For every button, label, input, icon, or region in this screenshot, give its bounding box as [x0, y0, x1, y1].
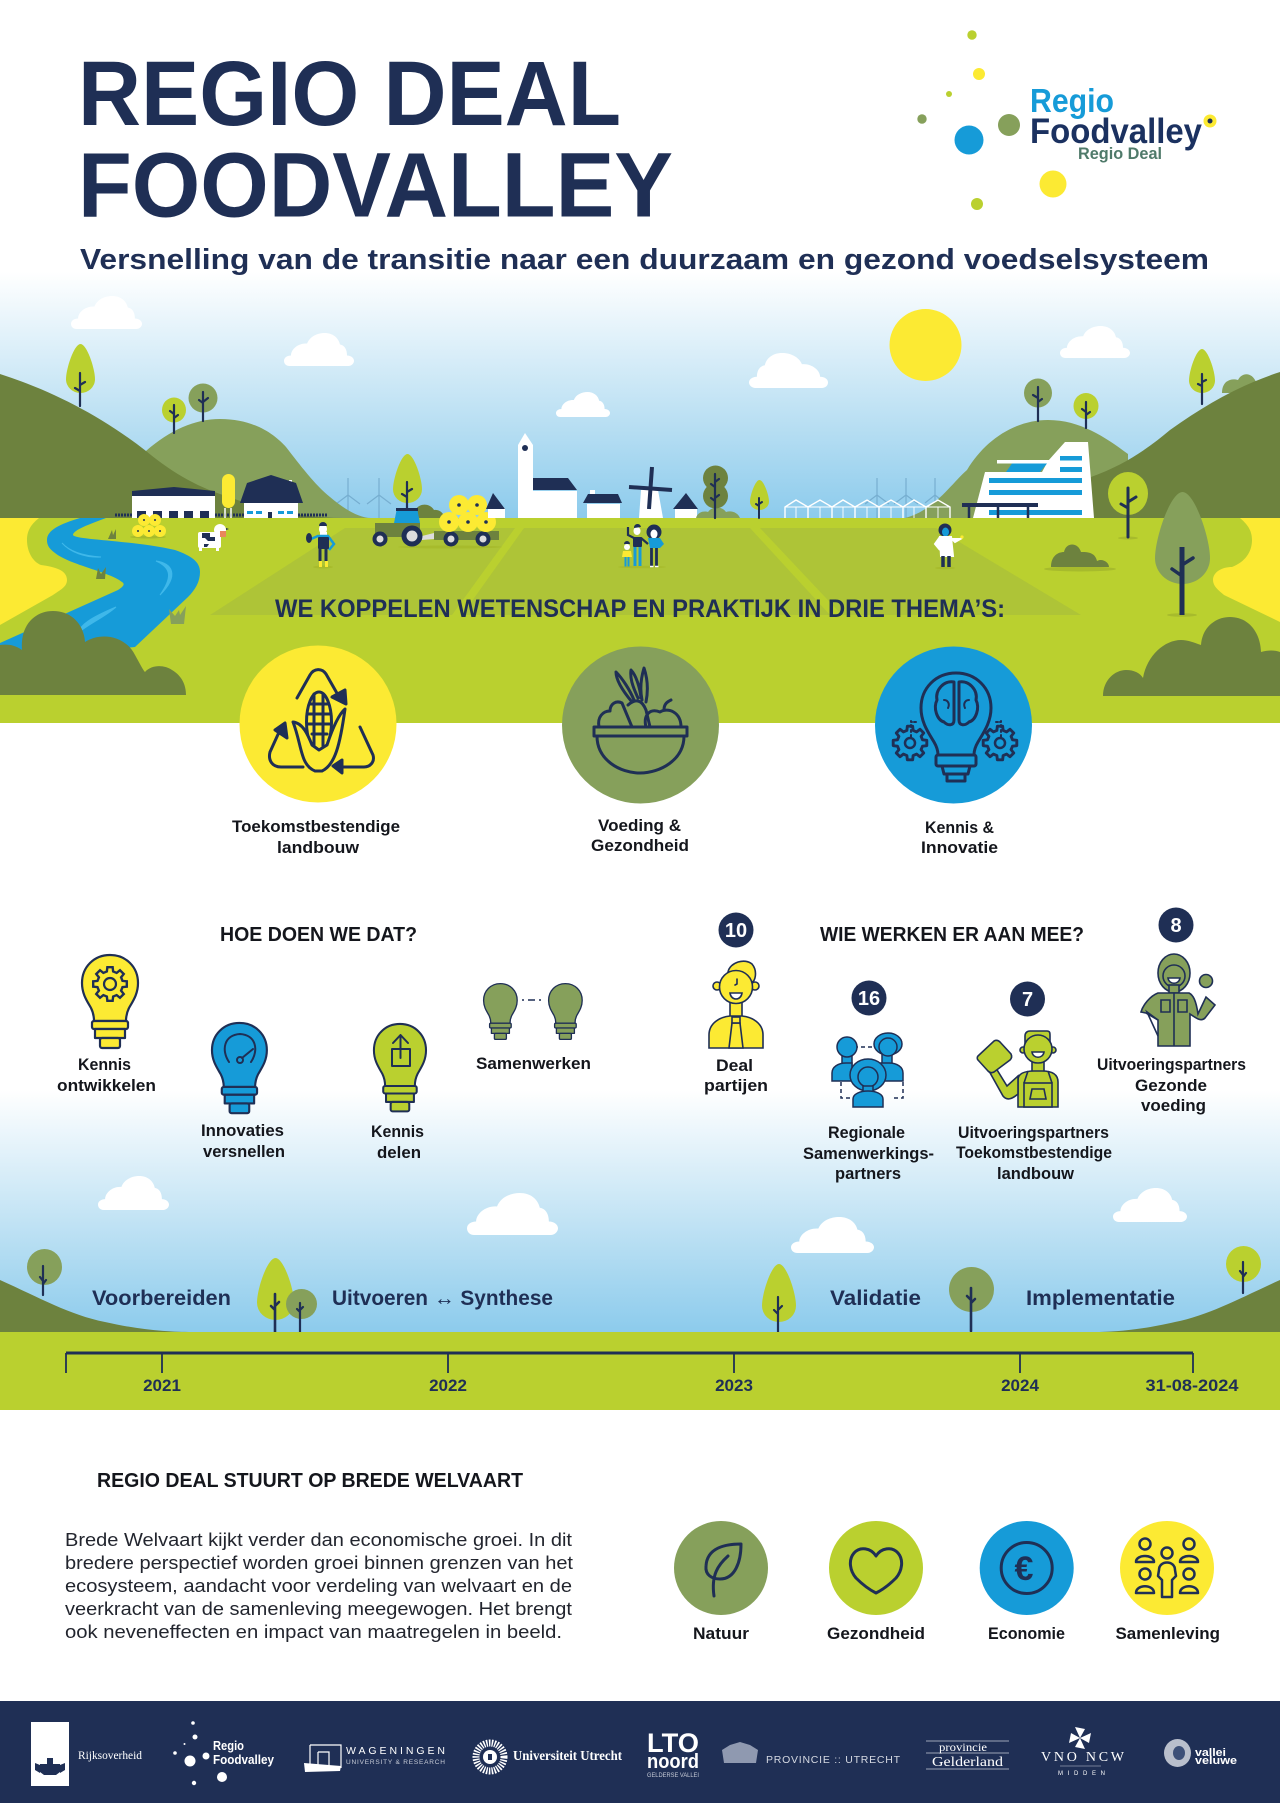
phase labels: Voorbereiden: [92, 1287, 231, 1310]
logo: Provincie Utrecht: [722, 1742, 901, 1766]
ground lower: [0, 1332, 1280, 1410]
item: Kennis ontwikkelen: Kennis: [78, 1055, 131, 1074]
logo: VNO NCW Midden: VNO NCW: [1041, 1750, 1125, 1765]
panel: hoe doen we dat: [57, 924, 591, 1162]
item: Uitvoeringspartners Gezonde voeding: Gezonde: [1135, 1076, 1207, 1095]
item: Kennis delen: Kennis: [371, 1122, 424, 1141]
logo: LTO Noord: LTO: [647, 1728, 699, 1758]
logo: Provincie Gelderland: [926, 1740, 1009, 1770]
item: Kennis delen: delen: [377, 1143, 421, 1162]
panel: timeline scene: [0, 1176, 1280, 1410]
hay bales left: [130, 514, 166, 538]
logo: Regio Foodvalley: [173, 1721, 274, 1785]
item: Uitvoeringspartners Toekomstbestendige landbouw: Uitvoeringspartners: [958, 1123, 1109, 1142]
sky: [0, 272, 1280, 519]
panel: wie werken er aan mee: [704, 908, 1246, 1183]
mother: [646, 524, 662, 540]
welvaart: Samenleving: [1116, 1521, 1220, 1643]
circle olive: [562, 646, 719, 804]
label: Gezondheid: [591, 836, 689, 855]
logo: Regio Foodvalley: Foodvalley: [213, 1753, 274, 1767]
logo: Rijksoverheid: [31, 1722, 142, 1786]
label: [232, 817, 400, 857]
item: Regionale Samenwerkingspartners: 16: [858, 988, 880, 1010]
label: Toekomstbestendige: [232, 817, 400, 836]
label: Kennis &: [925, 818, 994, 837]
logo: LTO Noord: noord: [647, 1751, 699, 1773]
tractor with tree: [372, 454, 502, 548]
item: Uitvoeringspartners Gezonde voeding: 8: [1170, 915, 1182, 937]
item: Regionale Samenwerkingspartners: partners: [835, 1164, 901, 1183]
phase labels: [92, 1287, 1175, 1310]
paragraph: bredere perspectief worden groei binnen grenzen van het: [65, 1552, 573, 1573]
subtitle: Versnelling van de transitie naar een duurzaam en gezond voedselsysteem: [80, 244, 1209, 276]
theme: Kennis & Innovatie: [875, 646, 1032, 857]
poplar: [222, 474, 235, 518]
item: Deal partijen: [704, 912, 768, 1095]
hills lower: [0, 1280, 1280, 1332]
theme: Voeding & Gezondheid: [562, 646, 719, 855]
phase labels: Validatie: [830, 1287, 921, 1310]
item: Uitvoeringspartners Gezonde voeding: Uitvoeringspartners: [1097, 1055, 1246, 1074]
scientist: [935, 524, 964, 569]
heading: REGIO DEAL STUURT OP BREDE WELVAART: [97, 1470, 523, 1492]
timeline axis: 2024: [1001, 1376, 1039, 1395]
child: [624, 544, 630, 550]
trees on hills: [66, 344, 1215, 433]
welvaart: Economie: [980, 1521, 1074, 1643]
cow: [198, 524, 229, 551]
item: Samenwerken: Samenwerken: [476, 1054, 591, 1073]
item: Regionale Samenwerkingspartners: Samenwerkings-: [803, 1144, 934, 1163]
heading: WIE WERKEN ER AAN MEE?: [820, 924, 1084, 946]
item: Kennis ontwikkelen: [57, 955, 156, 1095]
circle yellow: [240, 646, 396, 802]
item: Regionale Samenwerkingspartners: [803, 980, 934, 1183]
greenhouses: [785, 500, 950, 518]
father: [634, 527, 640, 535]
logo: LTO Noord: GELDERSE VALLEI: [647, 1772, 699, 1779]
item: Deal partijen: 10: [725, 920, 747, 942]
logo: Regio Foodvalley: Regio: [1030, 82, 1114, 119]
river: [0, 518, 200, 660]
logo: LTO Noord: [647, 1728, 699, 1779]
welvaart: Natuur: [674, 1521, 768, 1643]
wind turbines: [336, 478, 945, 518]
panel: brede welvaart text: [65, 1470, 573, 1642]
item: Innovaties versnellen: versnellen: [203, 1142, 285, 1161]
item: Deal partijen: partijen: [704, 1076, 768, 1095]
phase labels: Uitvoeren ↔ Synthese: [332, 1287, 553, 1310]
village houses and church: [486, 433, 698, 518]
item: Uitvoeringspartners Gezonde voeding: [1097, 908, 1246, 1115]
farm building: [115, 487, 328, 518]
theme: Toekomstbestendige landbouw: [232, 646, 400, 857]
item: Innovaties versnellen: [201, 1023, 285, 1161]
bush left: [0, 611, 186, 695]
bush right: [1103, 617, 1280, 696]
family: [618, 524, 666, 568]
label: [921, 818, 998, 857]
logo: VNO NCW Midden: MIDDEN: [1058, 1771, 1105, 1777]
shrub behind tractor: [400, 505, 445, 518]
icon: corn in recycling arrows: [269, 670, 373, 773]
timeline axis: 31-08-2024: [1146, 1376, 1239, 1395]
research building: [962, 442, 1094, 518]
timeline axis: 2023: [715, 1376, 753, 1395]
panel: landscape scene: [0, 272, 1280, 723]
heading: HOE DOEN WE DAT?: [220, 924, 417, 946]
logo: Rijksoverheid: Rijksoverheid: [78, 1748, 142, 1762]
logo: VNO NCW Midden: [1041, 1727, 1125, 1777]
timeline axis: 2021: [143, 1376, 181, 1395]
item: Uitvoeringspartners Toekomstbestendige landbouw: [956, 982, 1112, 1183]
logo: Universiteit Utrecht: [476, 1743, 622, 1771]
label: [591, 816, 689, 855]
yellow fields: [0, 518, 1280, 625]
title: [78, 43, 673, 236]
phase labels: Implementatie: [1026, 1287, 1175, 1310]
logo: Regio Foodvalley: [917, 30, 1216, 210]
welvaart: Economie: Economie: [988, 1624, 1065, 1643]
welvaart: Economie: €: [1015, 1550, 1034, 1588]
field patch with paths: [210, 528, 1081, 615]
label: landbouw: [277, 838, 360, 857]
hills right: [905, 372, 1280, 518]
hills left: [0, 374, 371, 518]
logo: Vallei Veluwe: vallei: [1195, 1747, 1226, 1759]
farm house: [240, 475, 303, 518]
logo: Vallei Veluwe: veluwe: [1195, 1755, 1237, 1767]
logo: Wageningen: [304, 1745, 445, 1772]
logo: Universiteit Utrecht: Universiteit Utrecht: [513, 1748, 622, 1763]
logo: Wageningen: UNIVERSITY & RESEARCH: [346, 1759, 445, 1766]
heading: themes: WE KOPPELEN WETENSCHAP EN PRAKTIJK IN DRIE THEMA’S:: [275, 595, 1005, 623]
label: Voeding &: [598, 816, 681, 835]
welvaart: Gezondheid: Gezondheid: [827, 1624, 925, 1643]
paragraph: [65, 1529, 573, 1642]
logo: Regio Foodvalley: Foodvalley: [1030, 112, 1203, 151]
trees in village: [696, 466, 769, 518]
paragraph: ook neveneffecten en impact van maatregelen in beeld.: [65, 1621, 562, 1642]
title: FOODVALLEY: [78, 134, 673, 236]
welvaart: Samenleving: Samenleving: [1116, 1624, 1220, 1643]
item: Regionale Samenwerkingspartners: Regionale: [828, 1123, 905, 1142]
icon: bowl with vegetables: [594, 668, 687, 773]
logo: Regio Foodvalley: Regio: [213, 1739, 244, 1753]
logo: Provincie Gelderland: Gelderland: [932, 1755, 1003, 1770]
trees lower: [27, 1246, 1261, 1332]
welvaart: Natuur: Natuur: [693, 1624, 749, 1643]
timeline axis: [66, 1353, 1239, 1395]
item: Samenwerken: [476, 984, 591, 1073]
small shrub right: [1044, 544, 1116, 572]
item: Uitvoeringspartners Toekomstbestendige landbouw: Toekomstbestendige: [956, 1143, 1112, 1162]
tree on tractor: [393, 454, 422, 523]
welvaart: Gezondheid: [827, 1521, 925, 1643]
timeline axis: 2022: [429, 1376, 467, 1395]
item: Uitvoeringspartners Gezonde voeding: voeding: [1141, 1096, 1206, 1115]
logo: Regio Foodvalley: Regio Deal: [1078, 144, 1162, 163]
label: Innovatie: [921, 838, 998, 857]
windmill: [629, 467, 672, 518]
logo: Vallei Veluwe: [1164, 1739, 1237, 1767]
ground: [0, 518, 1280, 723]
paragraph: ecosysteem, aandacht voor verdeling van welvaart en de: [65, 1575, 572, 1596]
paragraph: Brede Welvaart kijkt verder dan economische groei. In dit: [65, 1529, 572, 1550]
sky band lower: [0, 1090, 1280, 1333]
grass tufts: [96, 529, 186, 624]
big trees right: [1108, 472, 1210, 617]
logo: Wageningen: WAGENINGEN: [346, 1745, 445, 1757]
logo: Provincie Utrecht: PROVINCIE :: UTRECHT: [766, 1754, 901, 1766]
item: Deal partijen: Deal: [716, 1056, 753, 1075]
hay bales on trailer: [439, 495, 496, 532]
item: Kennis delen: [371, 1024, 426, 1162]
sun: [890, 309, 962, 381]
paragraph: veerkracht van de samenleving meegewogen. Het brengt: [65, 1598, 572, 1619]
item: Kennis ontwikkelen: ontwikkelen: [57, 1076, 156, 1095]
item: Innovaties versnellen: Innovaties: [201, 1121, 284, 1140]
title: REGIO DEAL: [78, 43, 621, 145]
footer: [0, 1701, 1280, 1803]
clouds lower: [98, 1176, 1187, 1253]
farmer: [306, 522, 334, 568]
item: Uitvoeringspartners Toekomstbestendige landbouw: 7: [1022, 989, 1033, 1011]
circle blue: [875, 646, 1032, 804]
item: Uitvoeringspartners Toekomstbestendige landbouw: landbouw: [997, 1164, 1075, 1183]
clouds: [71, 296, 1130, 417]
logo: Provincie Gelderland: provincie: [939, 1740, 987, 1754]
icon: bulb with brain and gears: [893, 673, 1017, 781]
